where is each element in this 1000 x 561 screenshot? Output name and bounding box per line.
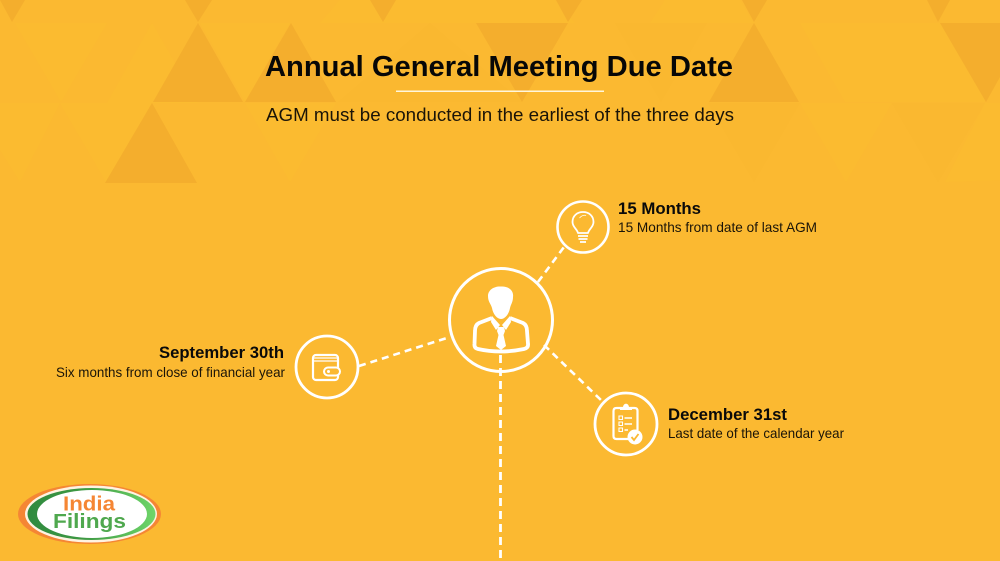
text: 15 Months: 15 Months from date of last AGM	[618, 219, 817, 235]
icon: collar and tie	[491, 316, 511, 350]
title: Annual General Meeting Due Date	[265, 51, 733, 83]
icon: shoulders	[474, 318, 528, 352]
text: 15 Months: 15 Months	[618, 200, 701, 218]
text: 15 Months	[618, 200, 817, 235]
title underline	[396, 90, 604, 92]
text: December 31st: Last date of the calendar year	[668, 425, 844, 441]
text: September 30th: Six months from close of financial year	[56, 364, 285, 380]
text: December 31st: December 31st	[668, 406, 788, 424]
logo: India Filings	[18, 484, 161, 544]
node: December 31st clipboard	[595, 393, 657, 455]
icon: head	[488, 286, 513, 319]
logo text: India: India	[63, 492, 116, 516]
icon: clipboard	[614, 408, 638, 439]
logo text: Filings: Filings	[53, 510, 126, 533]
connector: centre to September 30th	[359, 337, 450, 366]
node: 15 months lightbulb	[558, 202, 608, 252]
text: September 30th: September 30th	[159, 344, 284, 362]
connector: centre to December 31st	[544, 345, 602, 401]
connector: centre to 15 months	[538, 247, 564, 282]
text: September 30th	[56, 344, 285, 380]
background triangle pattern	[0, 0, 1000, 183]
connector: centre downward	[499, 355, 502, 561]
icon: wallet	[313, 355, 338, 380]
icon: lightbulb	[572, 212, 594, 242]
text: December 31st	[668, 406, 844, 441]
node: September 30th wallet	[296, 336, 358, 398]
subtitle: AGM must be conducted in the earliest of the three days	[266, 104, 734, 125]
centre node: person icon	[450, 268, 552, 372]
